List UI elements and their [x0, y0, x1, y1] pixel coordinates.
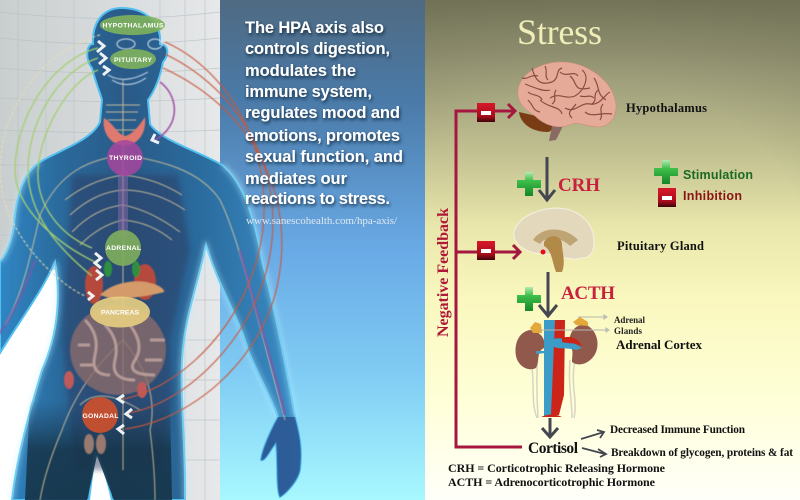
organs: [64, 117, 166, 454]
legend: [654, 160, 753, 207]
pancreas organ: [100, 281, 164, 300]
text block: HPA axis description: emotions, promotes: [245, 127, 400, 145]
effect: breakdown: Breakdown of glycogen, proteins & fat: [611, 447, 793, 459]
text block: HPA axis description: [245, 19, 403, 208]
ovaries and testes: [64, 371, 147, 454]
text block: HPA axis description: mediates our: [245, 170, 348, 188]
icon: plus CRH: [517, 172, 541, 196]
label: hypothalamus: Hypothalamus: [626, 101, 707, 115]
text block: HPA axis description: sexual function, and: [245, 148, 403, 166]
background: grid wall: [0, 0, 220, 500]
kidneys and vessels: [516, 317, 598, 418]
icon: sagittal brain: [514, 208, 594, 272]
text block: HPA axis description: reactions to stress.: [245, 190, 390, 208]
abbreviation key: ACTH = Adrenocorticotrophic Hormone: [448, 475, 656, 489]
label: thyroid: [107, 140, 143, 176]
ACTH label: ACTH: [561, 283, 615, 304]
icon: plus ACTH: [517, 287, 541, 311]
label: pituitary: PITUITARY: [114, 57, 152, 64]
icon: plus legend: [654, 160, 678, 184]
abbreviation key: [448, 461, 666, 489]
label: adrenal glands: Glands: [614, 326, 642, 336]
effect: immune: Decreased Immune Function: [610, 424, 746, 436]
arrow: ACTH: [539, 272, 557, 316]
intestines: [70, 305, 166, 395]
label: gonadal: GONADAL: [82, 413, 118, 420]
legend: inhibition: Inhibition: [683, 189, 742, 203]
background: blue text panel: [220, 0, 425, 500]
label: adrenal cortex: Adrenal Cortex: [616, 337, 702, 352]
label: hypothalamus: [100, 15, 165, 35]
hand shading: [261, 417, 301, 497]
inhibition badge middle: [477, 241, 495, 260]
abbreviation key: CRH = Corticotrophic Releasing Hormone: [448, 461, 666, 475]
adrenal gland pointers: [540, 315, 609, 332]
label: pancreas: [90, 296, 150, 328]
label: pituitary gland: Pituitary Gland: [617, 239, 704, 253]
torso shading: [62, 175, 190, 470]
chevrons: [88, 41, 159, 434]
cortisol label: Cortisol: [528, 440, 579, 457]
text block: HPA axis description: The HPA axis also: [245, 19, 384, 37]
label: pituitary: [110, 49, 156, 69]
label: adrenal: [105, 230, 141, 266]
label: adrenal glands: Adrenal: [614, 315, 645, 325]
kidneys: [85, 261, 156, 304]
text block: HPA axis description: immune system,: [245, 83, 372, 101]
negative feedback label: Negative Feedback: [435, 208, 452, 337]
background: stress panel: [425, 0, 800, 500]
text block: HPA axis description: regulates mood and: [245, 104, 400, 122]
hormone arcs: [0, 35, 282, 429]
legend: stimulation: Stimulation: [683, 168, 753, 182]
inhibition badge top: [477, 103, 495, 122]
arrow: to cortisol: [542, 418, 558, 437]
icon: brain: [518, 62, 616, 141]
label: hypothalamus: HYPOTHALAMUS: [102, 22, 164, 30]
label: gonadal: [82, 397, 118, 433]
label: thyroid: THYROID: [109, 155, 142, 162]
face: [108, 39, 162, 85]
text block: HPA axis description: modulates the: [245, 62, 356, 80]
title: Stress: [517, 12, 602, 52]
label: adrenal: ADRENAL: [106, 245, 141, 252]
label: adrenal glands: [614, 315, 645, 336]
cortisol effect arrows: [581, 430, 606, 457]
source url: www.sanescohealth.com/hpa-axis/: [246, 215, 398, 227]
text block: HPA axis description: controls digestion,: [245, 40, 390, 58]
thyroid gland: [104, 117, 145, 145]
CRH label: CRH: [558, 175, 600, 196]
leg shading: [25, 400, 172, 500]
arrow: CRH: [539, 157, 555, 200]
negative feedback line: [456, 104, 522, 447]
label: pancreas: PANCREAS: [101, 310, 139, 316]
human body figure: [0, 8, 301, 500]
icon: minus legend: [658, 188, 676, 207]
nerves: [5, 80, 285, 500]
